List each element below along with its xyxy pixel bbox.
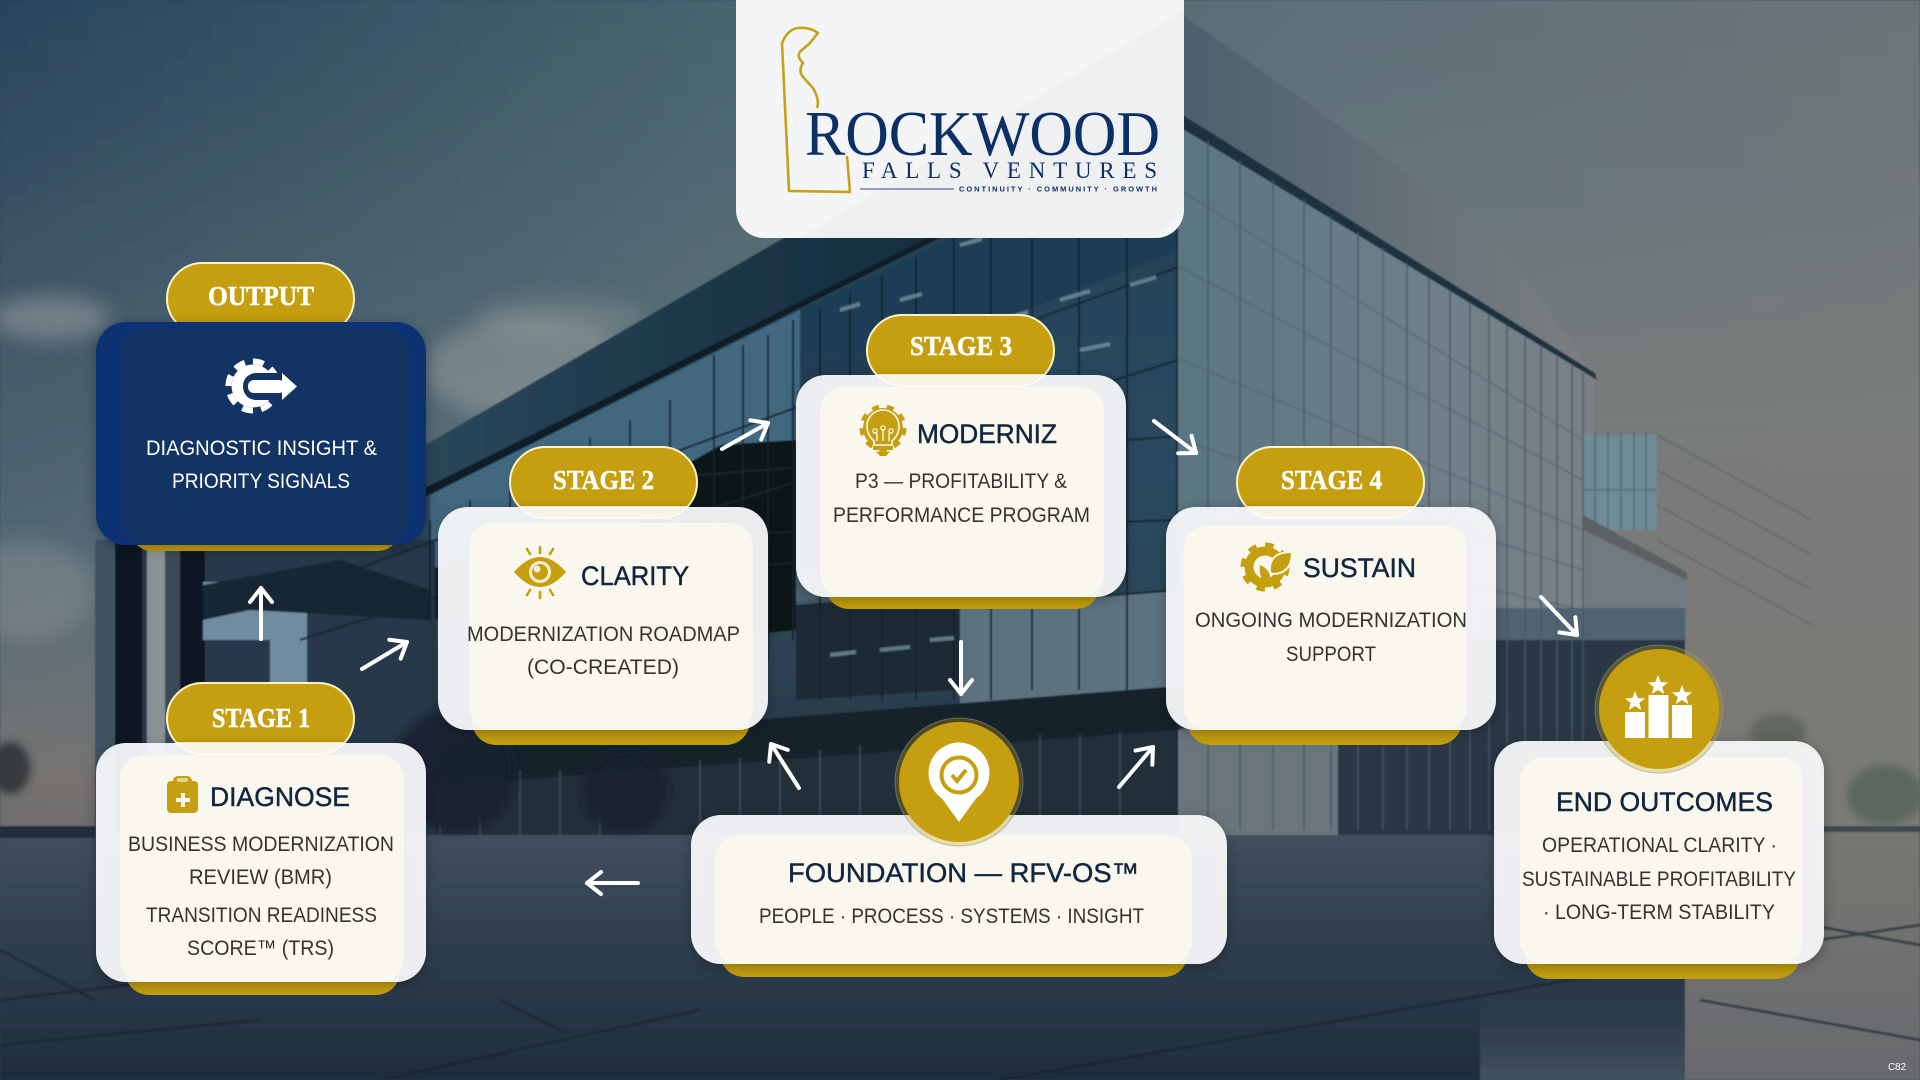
icon: podium with stars — [1595, 645, 1723, 773]
stage 3 badge — [867, 315, 1054, 386]
stage 2 badge — [510, 447, 697, 518]
icon: eye — [514, 547, 566, 598]
arrow: foundation to stage 2 — [771, 744, 799, 788]
stage 4 text: ONGOING MODERNIZATION — [1195, 608, 1467, 632]
output badge: OUTPUT — [208, 281, 314, 311]
stage 2 text — [467, 622, 740, 679]
stage 1 text: SCORE™ (TRS) — [187, 936, 334, 960]
stage 4 heading: SUSTAIN — [1303, 553, 1416, 583]
output text: PRIORITY SIGNALS — [172, 469, 350, 493]
stage 3 badge: STAGE 3 — [910, 331, 1012, 361]
icon: lightbulb gear — [862, 407, 904, 456]
icon: gear with arrow — [228, 362, 297, 410]
arrow: stage 3 to stage 4 — [1154, 421, 1196, 453]
icon: clipboard — [167, 776, 198, 813]
stage 4 text — [1195, 608, 1467, 666]
panel: end outcomes — [1494, 645, 1824, 979]
stage 3 text: P3 — PROFITABILITY & — [855, 469, 1067, 493]
panel: foundation — [691, 718, 1227, 977]
arrow: foundation to stage 1 — [587, 881, 638, 885]
panel: output — [96, 263, 426, 551]
stage 1 text: BUSINESS MODERNIZATION — [128, 832, 394, 856]
output text — [146, 436, 377, 493]
panel: stage 1 diagnose — [96, 683, 426, 995]
arrow: stage 2 to stage 3 — [722, 423, 768, 449]
end outcomes heading: END OUTCOMES — [1556, 787, 1773, 817]
end outcomes text: SUSTAINABLE PROFITABILITY — [1522, 867, 1796, 891]
end outcomes text: OPERATIONAL CLARITY · — [1542, 833, 1777, 857]
stage 4 badge: STAGE 4 — [1281, 465, 1382, 495]
logo subtitle: FALLS VENTURES — [862, 158, 1157, 183]
output badge — [167, 263, 354, 334]
logo tagline: CONTINUITY · COMMUNITY · GROWTH — [959, 184, 1157, 194]
foundation heading: FOUNDATION — RFV-OS™ — [788, 858, 1139, 888]
stage 3 heading: MODERNIZ — [917, 419, 1057, 449]
panel: stage 4 sustain — [1166, 447, 1496, 745]
stage 1 heading: DIAGNOSE — [210, 782, 350, 812]
end outcomes text: · LONG-TERM STABILITY — [1543, 900, 1775, 924]
panel: stage 3 modernize — [796, 315, 1126, 609]
arrow: stage 3 to foundation — [959, 642, 963, 694]
arrow: stage 1 to stage 2 — [362, 642, 407, 669]
stage 3 text — [833, 469, 1090, 527]
logo wordmark: ROCKWOOD — [805, 99, 1160, 169]
stage 4 text: SUPPORT — [1286, 642, 1376, 666]
stage 1 badge: STAGE 1 — [212, 703, 310, 733]
icon: gear with leaves — [1243, 545, 1292, 589]
foundation text: PEOPLE · PROCESS · SYSTEMS · INSIGHT — [759, 904, 1144, 928]
stage 1 badge — [167, 683, 354, 754]
output text: DIAGNOSTIC INSIGHT & — [146, 436, 377, 460]
stage 2 text: (CO-CREATED) — [527, 655, 679, 679]
stage 3 text: PERFORMANCE PROGRAM — [833, 503, 1090, 527]
end outcomes text — [1522, 833, 1796, 924]
stage 4 badge — [1237, 447, 1424, 518]
panel: logo — [736, 0, 1184, 238]
icon: Delaware outline — [782, 28, 850, 192]
stage 2 text: MODERNIZATION ROADMAP — [467, 622, 740, 646]
stage 1 text: TRANSITION READINESS — [146, 903, 377, 927]
stage 1 text: REVIEW (BMR) — [189, 865, 332, 889]
arrow: foundation to stage 4 — [1119, 747, 1153, 787]
icon: location pin badge — [895, 718, 1023, 846]
version tag: C82 — [1888, 1062, 1906, 1073]
stage 2 heading: CLARITY — [581, 561, 689, 591]
arrow: stage 1 to output — [259, 588, 263, 639]
stage 1 text — [128, 832, 394, 960]
arrow: stage 4 to end outcomes — [1541, 597, 1577, 635]
stage 2 badge: STAGE 2 — [553, 465, 654, 495]
panel: stage 2 clarity — [438, 447, 768, 745]
